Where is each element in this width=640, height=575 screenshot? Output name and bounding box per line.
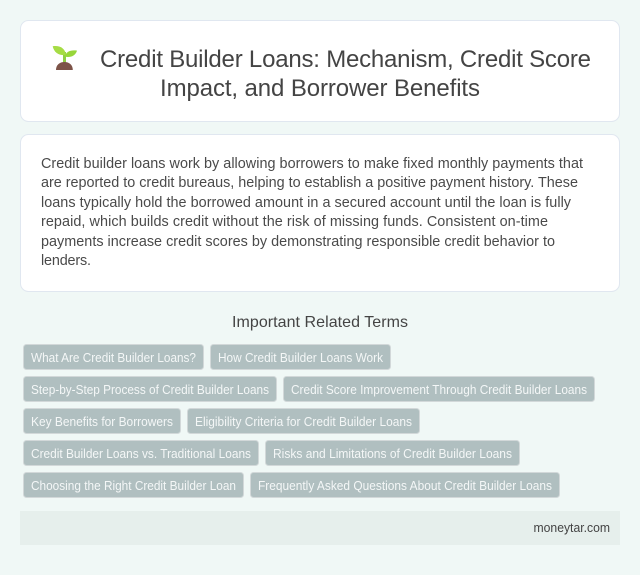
tag: Credit Builder Loans vs. Traditional Loans bbox=[31, 446, 251, 461]
tag: Choosing the Right Credit Builder Loan bbox=[31, 478, 236, 493]
panel: description bbox=[20, 134, 620, 292]
tag: Risks and Limitations of Credit Builder Loans bbox=[273, 446, 512, 461]
text block: description bbox=[41, 156, 583, 269]
text block: description: loans typically hold the borrowed amount in a secured account until the loan is fully bbox=[41, 195, 572, 211]
tag bbox=[210, 344, 390, 370]
footer: moneytar.com bbox=[534, 521, 610, 535]
icon: sprout bbox=[53, 46, 77, 70]
tag bbox=[24, 472, 244, 498]
tag: Eligibility Criteria for Credit Builder Loans bbox=[195, 414, 412, 429]
tag: What Are Credit Builder Loans? bbox=[31, 350, 196, 365]
tag bbox=[24, 376, 276, 402]
title bbox=[100, 46, 591, 102]
tag: Step-by-Step Process of Credit Builder Loans bbox=[31, 382, 269, 397]
tag bbox=[24, 408, 180, 434]
tag bbox=[284, 376, 594, 402]
text block: description: repaid, which builds credit without the risk of missing funds. Consistent on-time bbox=[41, 214, 548, 230]
heading: related terms: Important Related Terms bbox=[232, 314, 408, 331]
tag bbox=[266, 440, 520, 466]
title: Credit Builder Loans: Mechanism, Credit Score bbox=[100, 46, 591, 73]
tag: Frequently Asked Questions About Credit Builder Loans bbox=[258, 478, 552, 493]
tag: How Credit Builder Loans Work bbox=[218, 350, 383, 365]
tag bbox=[188, 408, 420, 434]
tag bbox=[24, 440, 258, 466]
tag bbox=[24, 344, 204, 370]
footer bbox=[20, 511, 620, 545]
title: Impact, and Borrower Benefits bbox=[160, 75, 480, 102]
tag list bbox=[24, 344, 594, 498]
panel: header bbox=[20, 20, 620, 122]
text block: description: payments increase credit scores by demonstrating responsible credit behavior to bbox=[41, 234, 555, 250]
text block: description: Credit builder loans work by allowing borrowers to make fixed monthly payments that bbox=[41, 156, 583, 172]
tag: Key Benefits for Borrowers bbox=[31, 414, 173, 429]
text block: description: are reported to credit bureaus, helping to establish a positive payment history. These bbox=[41, 175, 578, 191]
text block: description: lenders. bbox=[41, 253, 91, 269]
tag: Credit Score Improvement Through Credit Builder Loans bbox=[291, 382, 587, 397]
tag bbox=[250, 472, 560, 498]
